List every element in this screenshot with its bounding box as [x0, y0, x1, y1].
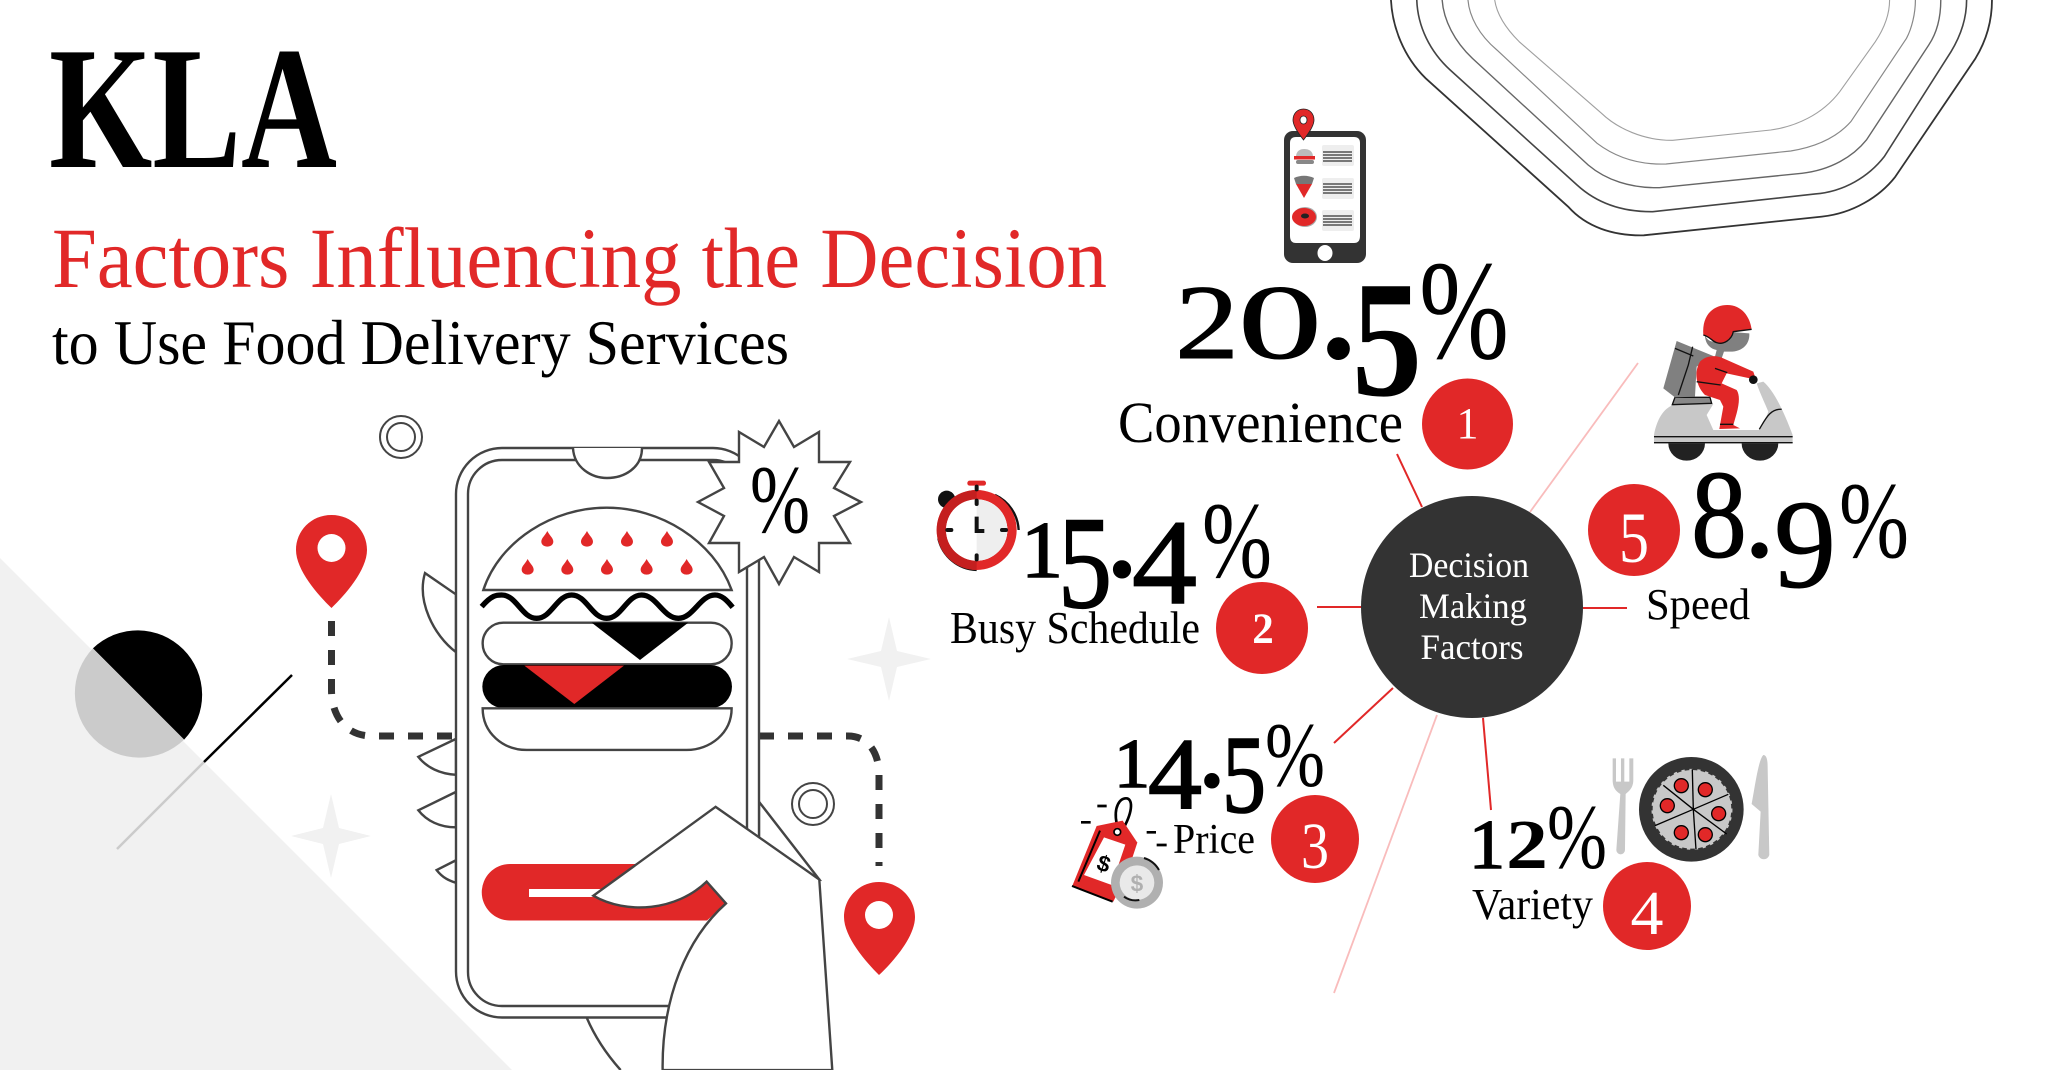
icon: phone with food menu	[1284, 109, 1366, 263]
value 15.4%: 5	[1058, 489, 1112, 636]
connector lines	[1317, 363, 1638, 993]
diagonal line	[117, 675, 292, 849]
icon: price tag and coin: $	[1131, 870, 1144, 896]
value 20.5%: %	[1419, 231, 1509, 389]
badge 3	[1271, 795, 1359, 883]
icon: delivery rider on scooter	[1654, 305, 1793, 461]
badge 5	[1588, 484, 1680, 578]
value 14.5%: 4	[1148, 718, 1202, 831]
factor 3: price	[1072, 702, 1359, 909]
icon: price tag and coin	[1072, 798, 1167, 909]
value 12%: %	[1547, 786, 1607, 888]
value 15.4%: 1	[1021, 507, 1063, 595]
badge 2: 2	[1252, 606, 1274, 653]
icon: stopwatch	[937, 481, 1019, 570]
value 14.5%: 1	[1114, 726, 1150, 803]
factor 4: variety	[1469, 755, 1769, 950]
discount badge: %	[750, 446, 810, 553]
sesame seeds	[522, 531, 693, 575]
contour lines top right	[1391, 0, 1992, 235]
logo: KLA	[49, 11, 337, 205]
icon: price tag and coin: $	[1094, 849, 1114, 878]
sparkle left	[291, 794, 371, 878]
badge 2	[1216, 582, 1308, 674]
white patty with black triangle	[483, 623, 732, 664]
badge 1: 1	[1456, 399, 1478, 448]
dashed route right	[759, 736, 879, 866]
value 12%: 2	[1506, 807, 1548, 884]
value 8.9%: 9	[1774, 476, 1836, 615]
hand	[593, 807, 832, 1070]
factor 1: convenience	[1118, 109, 1513, 470]
lettuce wave	[482, 595, 733, 618]
central circle: Factors	[1420, 627, 1524, 667]
badge 3: 3	[1301, 810, 1329, 883]
phone body	[456, 448, 759, 1018]
label variety: Variety	[1472, 880, 1593, 929]
value 8.9%: 8	[1691, 446, 1747, 585]
value 20.5%: 2	[1175, 264, 1239, 381]
phone illustration	[418, 421, 861, 1070]
central circle	[1361, 496, 1583, 718]
title: Factors Influencing the Decision	[52, 210, 1107, 306]
factor 5: speed	[1588, 305, 1909, 629]
location pin right	[844, 882, 915, 975]
ring left	[380, 416, 422, 458]
burger	[482, 508, 733, 750]
factor 2: busy schedule	[937, 478, 1308, 674]
label price: Price	[1173, 817, 1255, 863]
sparkle right	[847, 617, 931, 701]
background grey triangle	[0, 558, 512, 1070]
leaves behind phone	[418, 573, 819, 1070]
badge 1	[1422, 378, 1513, 470]
label convenience: Convenience	[1118, 390, 1403, 455]
badge 4: 4	[1630, 880, 1664, 948]
black patty with red triangle	[482, 665, 732, 708]
burger bottom bun	[483, 708, 732, 750]
central circle: Decision	[1409, 545, 1529, 585]
central circle: Making	[1419, 586, 1527, 626]
value 20.5%: .	[1321, 234, 1356, 389]
value 15.4%: .	[1108, 478, 1136, 602]
burger top bun	[483, 508, 732, 590]
label busy schedule: Busy Schedule	[950, 603, 1200, 653]
location pin left	[296, 515, 367, 608]
value 8.9%: %	[1839, 460, 1909, 581]
dashed route left	[332, 621, 456, 736]
value 15.4%: %	[1202, 480, 1272, 601]
icon: pizza with fork and knife	[1613, 755, 1769, 862]
badge 5: 5	[1619, 498, 1649, 578]
ring right	[792, 783, 834, 825]
value 20.5%: 5	[1352, 247, 1422, 431]
value 14.5%: 5	[1222, 714, 1266, 837]
red order button	[482, 864, 726, 920]
value 20.5%: 0	[1238, 264, 1322, 381]
value 14.5%: %	[1265, 704, 1325, 806]
subtitle: to Use Food Delivery Services	[52, 308, 789, 378]
label speed: Speed	[1646, 580, 1750, 629]
value 8.9%: .	[1747, 468, 1772, 579]
value 15.4%: 4	[1132, 496, 1197, 630]
half black half grey disc	[75, 630, 202, 758]
value 12%: 1	[1469, 807, 1505, 884]
value 14.5%: .	[1200, 702, 1224, 808]
badge 4	[1603, 862, 1691, 950]
discount badge	[698, 421, 861, 584]
